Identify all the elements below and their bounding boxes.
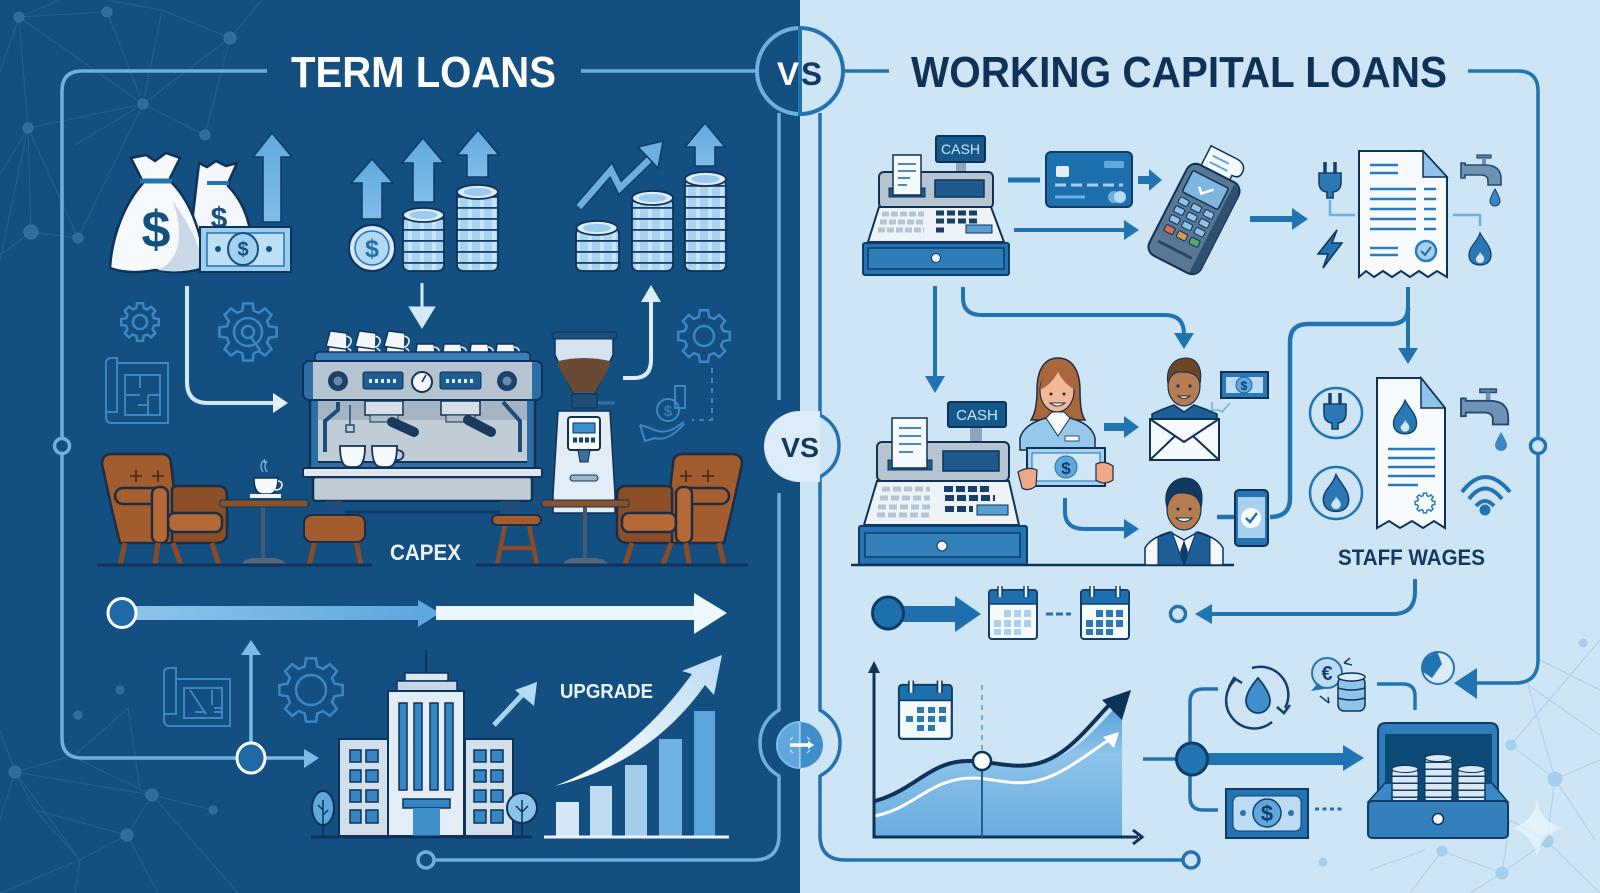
small bill: [1212, 372, 1268, 412]
receipt paper: [1196, 146, 1247, 194]
receipt: [889, 188, 925, 197]
arrow to terminal small: [1138, 169, 1162, 191]
drip tray: [313, 477, 532, 501]
arrow to staff member: [1065, 498, 1139, 539]
sparkle watermark: [1512, 800, 1562, 858]
arrowhead into pie: [1454, 668, 1477, 699]
dots to cash box: [1315, 808, 1345, 810]
arrow bill down: [1398, 287, 1418, 364]
arrow to terminal long: [1014, 220, 1139, 240]
white curve: [875, 732, 1119, 816]
icon: hand with coin: $: [664, 403, 673, 420]
icon: wifi: [1462, 477, 1510, 514]
dark curve: [875, 702, 1112, 801]
right frame connector: [820, 71, 1546, 868]
heading: working capital loans: WORKING CAPITAL LOANS: [911, 48, 1447, 97]
timeline arrow: term loan: [108, 593, 727, 634]
icon: money bags and bill: $: [211, 202, 228, 235]
right panel background: [800, 0, 1600, 893]
espresso cups: [340, 446, 403, 467]
top VS badge: [757, 28, 843, 114]
icon: money bags and bill: [110, 153, 291, 272]
icon: calendar light: [989, 586, 1037, 639]
icon: target gear: [219, 303, 277, 361]
icon: water cycle: [1226, 667, 1290, 728]
network pattern top-left: [0, 0, 262, 260]
arrow register to staff: [963, 287, 1194, 349]
keyboard: [868, 207, 1004, 242]
woman cashier with bill: [1018, 358, 1113, 490]
bar chart with rising arrow: [544, 655, 729, 837]
armchair right: [617, 454, 742, 565]
bill held: [1027, 448, 1105, 486]
main tower: [388, 691, 464, 836]
connector to cash box: [1377, 684, 1415, 710]
marker: [981, 770, 983, 837]
coin stack a: [576, 221, 619, 271]
arrow to invoice: [1250, 208, 1308, 230]
icon: euro bubble and coins: [1311, 658, 1365, 711]
arrow up and node from frame: [237, 640, 319, 773]
drawer: [863, 243, 1009, 275]
small growth arrow: [494, 682, 537, 725]
area: [875, 700, 1122, 836]
middle VS badge: [764, 411, 820, 482]
icon: water drop: [1490, 189, 1500, 206]
cups on top: [326, 331, 519, 361]
bill connectors: [1330, 200, 1480, 226]
man in vest: [1145, 478, 1223, 565]
icon: plug: [1319, 162, 1341, 198]
network pattern bottom-left: [0, 686, 238, 893]
icon: pie: [1422, 651, 1454, 684]
dash connector: [1008, 178, 1040, 182]
coin stack 2: [457, 185, 498, 271]
icon: right gear: [678, 310, 730, 362]
keyboard: [864, 481, 1019, 525]
icon: blueprint lower: [164, 668, 230, 726]
arrow curved from bags to machine: [187, 286, 288, 413]
stool: [304, 515, 365, 565]
grinder body: [553, 411, 615, 513]
man with envelope: [1150, 358, 1219, 460]
node and branches to cash box: [1143, 689, 1364, 810]
icon: gear lower: [279, 658, 343, 722]
sign: CASH: [941, 141, 980, 157]
zigzag arrow: [579, 141, 663, 207]
icon: money bags and bill: $: [142, 201, 171, 259]
icon: water drop lower: [1495, 432, 1507, 451]
label: staff wages: STAFF WAGES: [1338, 545, 1485, 570]
box body: [1368, 801, 1508, 838]
connector bill to phone: [1217, 308, 1408, 517]
swoosh arrow: [555, 655, 722, 786]
arrow up: money: [253, 133, 292, 222]
trees: [312, 791, 537, 836]
gas bill document: [1377, 378, 1445, 528]
icon: euro bubble and coins: €: [1321, 663, 1333, 685]
small bill: $: [1241, 379, 1248, 393]
sign: CASH: [956, 407, 998, 424]
group heads and handles: [365, 401, 403, 415]
label: capex: CAPEX: [390, 540, 461, 565]
bars: [556, 711, 715, 836]
left panel background: [0, 0, 800, 893]
arrow up 3: [457, 130, 499, 177]
envelope: [1150, 419, 1219, 460]
top VS badge: V: [777, 56, 800, 92]
network pattern bottom-right: [1319, 639, 1600, 893]
payment terminal: [1145, 141, 1253, 278]
receipt: [888, 460, 932, 470]
lid: [1378, 723, 1498, 800]
machine rail: [315, 352, 530, 361]
heading: term loans: TERM LOANS: [291, 48, 556, 97]
table right: [542, 500, 629, 565]
axes: [874, 667, 1138, 837]
armchair left: [102, 454, 227, 565]
arrow up 4: [685, 123, 725, 166]
feet: [325, 501, 520, 510]
floor lines: [97, 564, 748, 566]
rising coin stacks with zigzag arrow: [576, 123, 726, 271]
cash register top: [863, 136, 1009, 275]
wing windows: [350, 750, 503, 823]
icon: tap lower: [1461, 389, 1508, 424]
icon: phone: [1235, 490, 1268, 546]
sign: [936, 136, 985, 174]
credit card: [1046, 152, 1132, 207]
coin stack 1: [403, 208, 444, 271]
arrow up 1: [351, 159, 393, 219]
arrow from wages back: [1170, 579, 1415, 624]
icon: circled flame: [1310, 467, 1362, 519]
utility bill document: [1359, 151, 1447, 277]
icon: calendar dark: [1081, 586, 1129, 639]
cash flow chart: [868, 661, 1142, 844]
right wing: [465, 739, 513, 836]
head: [879, 172, 993, 208]
building: [311, 650, 537, 837]
coin stack b: [632, 191, 673, 271]
cash register lower: [859, 402, 1027, 565]
table left with cup: [220, 459, 308, 565]
bill lower: $: [1261, 801, 1273, 826]
coin stack c: [685, 172, 726, 271]
box trays: [1368, 783, 1508, 802]
top VS badge: S: [801, 56, 822, 92]
bottom swap badge: [777, 722, 823, 768]
coins: [1392, 754, 1485, 802]
icon: circled plug: [1310, 388, 1362, 438]
hopper glass: [555, 338, 613, 393]
grinder neck: [572, 394, 597, 408]
coin: $: [365, 235, 379, 263]
coin: [349, 225, 395, 271]
arrow cashier to envelope: [1104, 416, 1139, 438]
ground line register to staff: [851, 564, 1234, 566]
cash box with coins: [1368, 723, 1508, 838]
machine body: [310, 398, 535, 470]
coffee grinder: [552, 332, 617, 513]
antenna and top tiers: [425, 650, 427, 673]
arrow register down: [925, 286, 945, 393]
middle VS badge: VS: [781, 432, 819, 463]
arrow up 2: [402, 138, 444, 202]
label: upgrade: UPGRADE: [560, 681, 653, 703]
sign: [948, 402, 1006, 442]
left wing: [339, 739, 388, 836]
bill lower: [1226, 789, 1308, 838]
icon: small gear: [121, 303, 159, 341]
icon: tap: [1461, 155, 1501, 185]
icon: lightning: [1318, 230, 1342, 268]
chart calendar: [899, 681, 952, 739]
machine control panel: [303, 361, 542, 400]
grinder display: [568, 417, 600, 450]
drawer: [859, 526, 1027, 565]
arrow down into machine: [411, 283, 433, 326]
woman cashier with bill: $: [1061, 459, 1071, 478]
dashes between calendars: [1046, 612, 1071, 616]
icon: gas flame: [1469, 233, 1491, 265]
icon: blueprint: [106, 358, 168, 423]
espresso machine: [303, 331, 542, 512]
bar stool: [492, 515, 541, 565]
coin and coin stacks with arrows: [349, 130, 499, 271]
timeline arrow: working capital: [872, 596, 981, 632]
icon: money bags and bill: $: [237, 239, 249, 261]
arrow curved from grinder up: [623, 285, 661, 378]
left frame connector: [54, 71, 779, 868]
head: [877, 442, 1009, 481]
icon: hand with coin: [640, 368, 712, 441]
